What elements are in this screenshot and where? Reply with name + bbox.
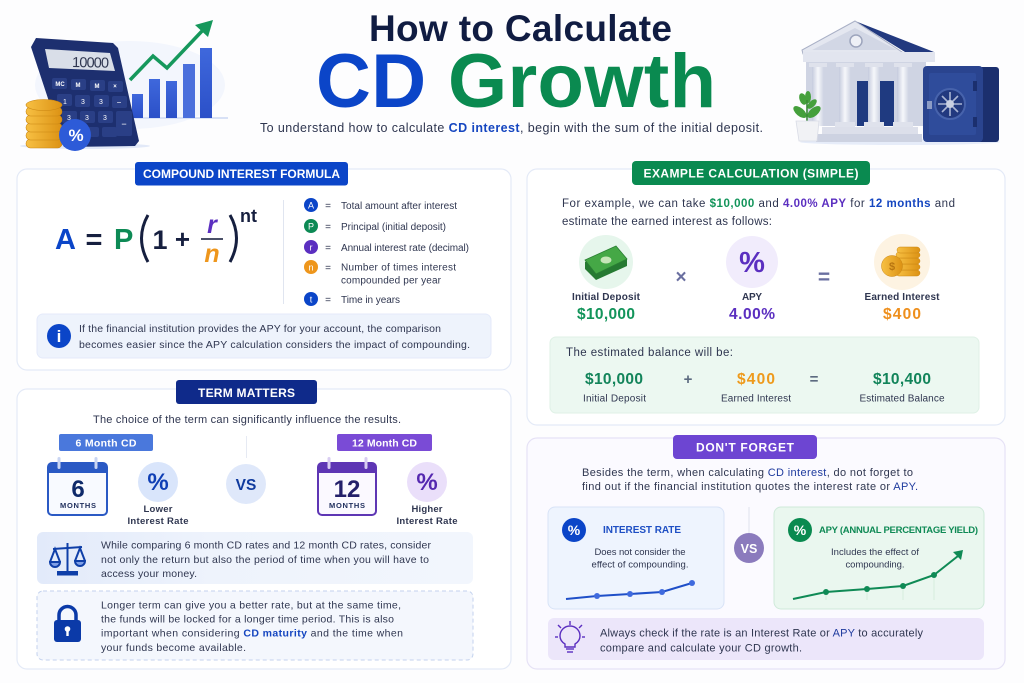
icon: calculator, coins and growth chart: − [117, 98, 122, 107]
equation: APY: % [739, 247, 765, 279]
comparison: 12 month CD: 12 Month CD [352, 438, 417, 450]
title: CD Growth [316, 39, 716, 124]
icon: calculator, coins and growth chart [20, 20, 228, 151]
icon: calculator, coins and growth chart: MC [55, 82, 65, 88]
callout: return versus access: not only the return but also the period of time when you will have to [101, 554, 429, 566]
operator: equals: = [818, 266, 830, 289]
icon: cash stack [585, 246, 627, 280]
card: interest rate: effect of compounding. [592, 560, 688, 570]
panel: term matters [17, 380, 511, 669]
formula [55, 206, 257, 268]
legend: formula variables: Annual interest rate (decimal) [341, 243, 469, 254]
icon: padlock [54, 606, 81, 642]
callout: estimated balance: Earned Interest [721, 394, 791, 404]
legend: formula variables: Number of times interest [341, 262, 456, 274]
equation: earned interest: $400 [883, 306, 921, 323]
legend: formula variables: P [308, 222, 314, 232]
equation: APY: APY [742, 292, 762, 303]
text: don't forget intro: find out if the financial institution quotes the interest rate or APY. [582, 481, 918, 493]
callout: estimated balance: $10,400 [873, 371, 931, 388]
callout: APY info note: If the financial institution provides the APY for your account, the comparison [79, 323, 441, 335]
icon: calculator, coins and growth chart: 3 [99, 99, 103, 106]
card: interest rate: % [568, 522, 581, 538]
heading: compound interest formula [135, 162, 348, 186]
text: example intro: estimate the earned interest as follows: [562, 216, 772, 228]
icon: bank building with safe and plant [791, 21, 1000, 145]
equation: APY [726, 236, 778, 323]
comparison: 12 month CD: Interest Rate [396, 516, 458, 527]
icon: calculator, coins and growth chart: % [68, 126, 84, 145]
equation: earned interest: Earned Interest [864, 292, 940, 303]
card: APY: % [794, 522, 807, 538]
panel: example calculation [527, 161, 1005, 425]
equation: earned interest [864, 234, 940, 323]
icon: calculator, coins and growth chart: 10000 [72, 55, 109, 72]
heading: don't forget: DON'T FORGET [696, 440, 795, 454]
icon: gold coins [882, 247, 920, 276]
line chart: compounding growth [793, 550, 963, 600]
callout: estimated balance [550, 337, 979, 413]
legend: formula variables: Time in years [341, 295, 400, 306]
text: term intro: The choice of the term can significantly influence the results. [93, 414, 401, 426]
callout: estimated balance: $400 [737, 371, 775, 388]
legend: formula variables: A [308, 200, 314, 210]
callout: APY info note: i [57, 327, 61, 346]
callout: always check tip: Always check if the rate is an Interest Rate or APY to accurately [600, 628, 924, 640]
comparison: 12 month CD: % [416, 469, 438, 496]
VS badge: VS [741, 542, 757, 556]
icon: calculator, coins and growth chart: × [113, 84, 117, 90]
line chart: flat growth [566, 580, 695, 599]
callout: always check tip [548, 618, 984, 660]
legend: formula variables: = [325, 222, 331, 233]
text: example intro: For example, we can take $10,000 and 4.00% APY for 12 months and [562, 198, 955, 210]
icon: calculator, coins and growth chart: 3 [67, 115, 71, 122]
callout: always check tip: compare and calculate your CD growth. [600, 642, 802, 654]
legend: formula variables: n [308, 262, 314, 272]
VS badge: VS [236, 477, 256, 494]
callout: APY info note [37, 314, 491, 358]
legend: formula variables: = [325, 243, 331, 254]
callout: locked funds [37, 591, 473, 660]
formula: n [204, 240, 220, 268]
heading: don't forget [673, 435, 817, 459]
icon: calculator, coins and growth chart: 3 [85, 115, 89, 122]
callout: locked funds: your funds become available. [101, 642, 246, 654]
legend: formula variables: t [310, 294, 313, 304]
VS badge [226, 464, 266, 504]
equation: APY: 4.00% [729, 306, 775, 323]
card: APY: APY (ANNUAL PERCENTAGE YIELD) [819, 525, 978, 536]
icon: calculator, coins and growth chart: 1 [63, 99, 67, 106]
formula: + [175, 224, 190, 254]
comparison: 6 month CD: MONTHS [60, 501, 96, 510]
formula: A [55, 224, 76, 256]
card: interest rate: Does not consider the [594, 547, 686, 558]
callout: estimated balance: + [684, 371, 693, 388]
comparison: 6 month CD: 6 Month CD [76, 438, 137, 450]
comparison: 12 month CD [318, 434, 458, 527]
panel: don't forget [527, 435, 1005, 669]
icon: calculator, coins and growth chart: M [76, 83, 80, 89]
panel: compound interest formula [17, 162, 511, 370]
comparison: 6 month CD: % [147, 469, 169, 496]
legend: formula variables [304, 198, 469, 306]
heading: term matters [176, 380, 317, 404]
callout: estimated balance: = [810, 371, 819, 388]
VS badge [734, 533, 764, 563]
legend: formula variables: Principal (initial deposit) [341, 222, 446, 233]
formula: nt [240, 206, 257, 226]
comparison: 6 month CD: Interest Rate [128, 516, 188, 527]
heading: term matters: TERM MATTERS [198, 386, 295, 400]
comparison: 6 month CD: 6 [71, 476, 85, 503]
callout: estimated balance: $10,000 [585, 371, 643, 388]
legend: formula variables: = [325, 263, 331, 274]
equation: initial deposit: $10,000 [577, 306, 635, 323]
callout: locked funds: important when considering CD maturity and the time when [101, 628, 403, 640]
card: interest rate: INTEREST RATE [603, 525, 681, 536]
card: interest rate [548, 507, 724, 609]
equation: earned interest: $ [889, 261, 895, 273]
callout: return versus access: access your money. [101, 568, 197, 580]
icon: balance scale [50, 543, 85, 574]
comparison: 12 month CD: MONTHS [329, 501, 365, 510]
text: example intro [562, 198, 955, 228]
equation: initial deposit [572, 235, 641, 323]
operator: multiply: × [675, 267, 687, 288]
callout: estimated balance: The estimated balance will be: [566, 347, 733, 359]
legend: formula variables: Total amount after interest [341, 201, 457, 212]
callout: estimated balance: Initial Deposit [583, 394, 646, 404]
text: don't forget intro: Besides the term, when calculating CD interest, do not forget to [582, 467, 913, 479]
legend: formula variables: = [325, 295, 331, 306]
card: APY [774, 507, 984, 609]
callout: return versus access [37, 532, 473, 584]
legend: formula variables: r [310, 242, 312, 252]
formula: r [207, 211, 218, 239]
heading: example calculation [632, 161, 870, 185]
callout: locked funds: Longer term can give you a better rate, but at the same time, [101, 600, 401, 612]
heading: example calculation: EXAMPLE CALCULATION (SIMPLE) [644, 166, 858, 180]
card: APY: Includes the effect of [831, 547, 919, 558]
callout: return versus access: While comparing 6 month CD rates and 12 month CD rates, consider [101, 540, 432, 552]
title: How to Calculate [369, 8, 672, 49]
callout: APY info note: becomes easier since the APY calculation considers the impact of compounding. [79, 339, 470, 351]
formula: P [114, 224, 133, 256]
comparison: 12 month CD: Higher [412, 504, 443, 515]
icon: calculator, coins and growth chart: 3 [103, 115, 107, 122]
card: APY: compounding. [846, 560, 904, 570]
icon: calculator, coins and growth chart: M [94, 84, 100, 90]
callout: locked funds: the funds will be locked for a longer time period. This is also [101, 614, 394, 626]
icon: light bulb [555, 621, 585, 652]
icon: calculator, coins and growth chart: 3 [81, 99, 85, 106]
heading: compound interest formula: COMPOUND INTEREST FORMULA [143, 167, 340, 181]
equation: initial deposit: Initial Deposit [572, 292, 641, 303]
formula: = [86, 224, 102, 256]
formula: 1 [152, 225, 168, 255]
legend: formula variables: compounded per year [341, 276, 442, 286]
comparison: 12 month CD: 12 [334, 476, 360, 503]
comparison: 6 month CD: Lower [144, 504, 173, 515]
legend: formula variables: = [325, 201, 331, 212]
subtitle: To understand how to calculate CD interest, begin with the sum of the initial deposit. [260, 121, 763, 135]
text: don't forget intro [582, 467, 918, 493]
callout: estimated balance: Estimated Balance [860, 394, 945, 404]
icon: calculator, coins and growth chart: − [121, 119, 127, 129]
comparison: 6 month CD [48, 434, 188, 527]
